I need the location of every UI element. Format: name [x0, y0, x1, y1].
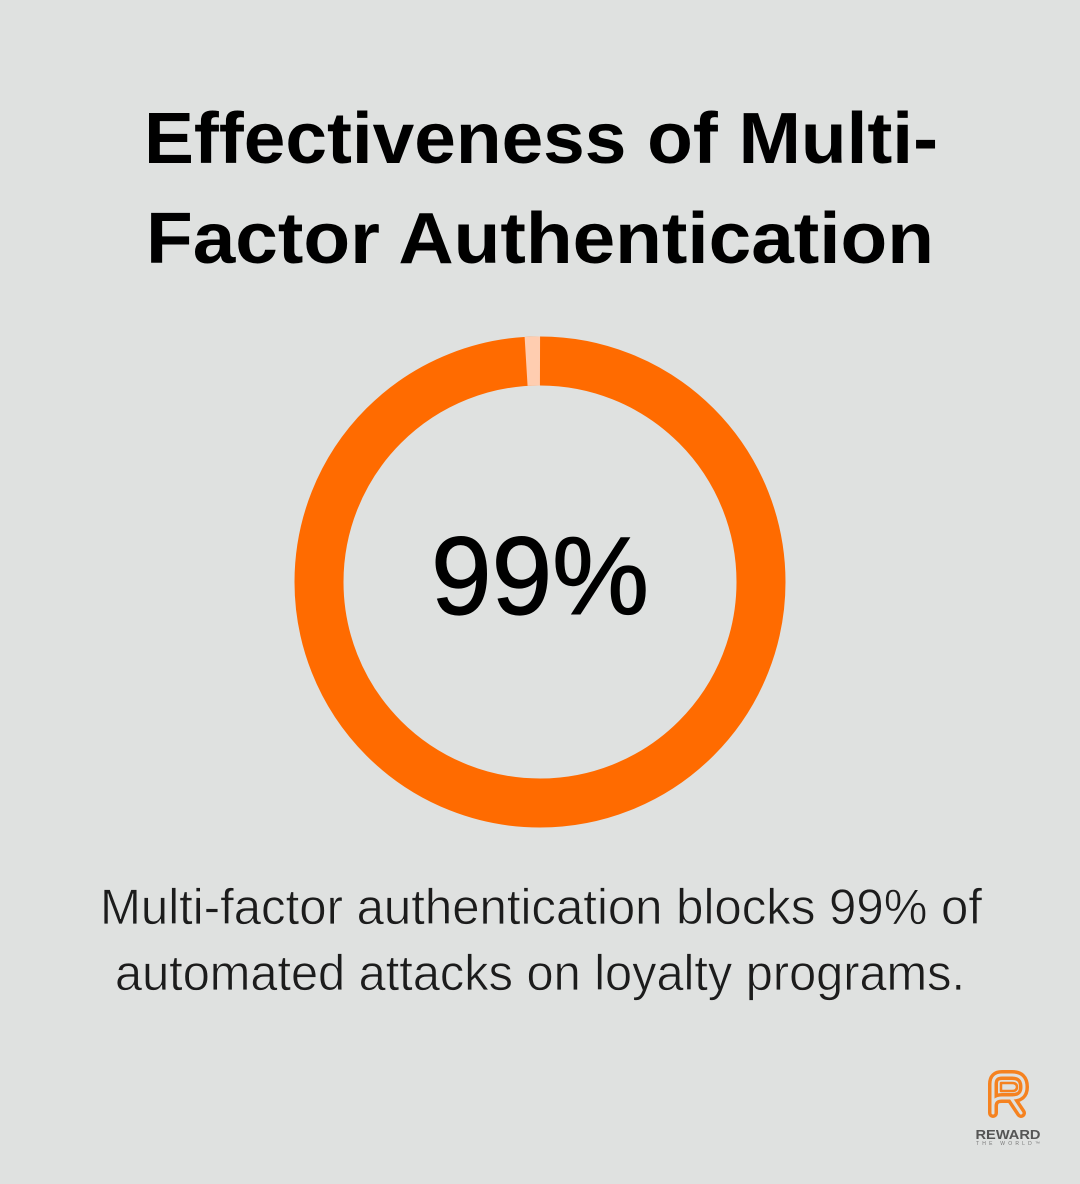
- logo: Reward the World: [976, 1075, 1040, 1147]
- icon: R mark: [993, 1075, 1024, 1113]
- donut center value: 99%: [431, 515, 649, 638]
- description text: Multi-factor authentication blocks 99% of: [100, 879, 982, 935]
- donut chart: 99 percent: [319, 361, 761, 803]
- title: Factor Authentication: [146, 199, 934, 279]
- description text: automated attacks on loyalty programs.: [115, 945, 965, 1001]
- logo wordmark: REWARD: [976, 1127, 1040, 1142]
- description text: [100, 879, 982, 1001]
- title: [144, 99, 938, 279]
- logo tagline: THE WORLD™: [976, 1141, 1040, 1147]
- title: Effectiveness of Multi-: [144, 99, 938, 179]
